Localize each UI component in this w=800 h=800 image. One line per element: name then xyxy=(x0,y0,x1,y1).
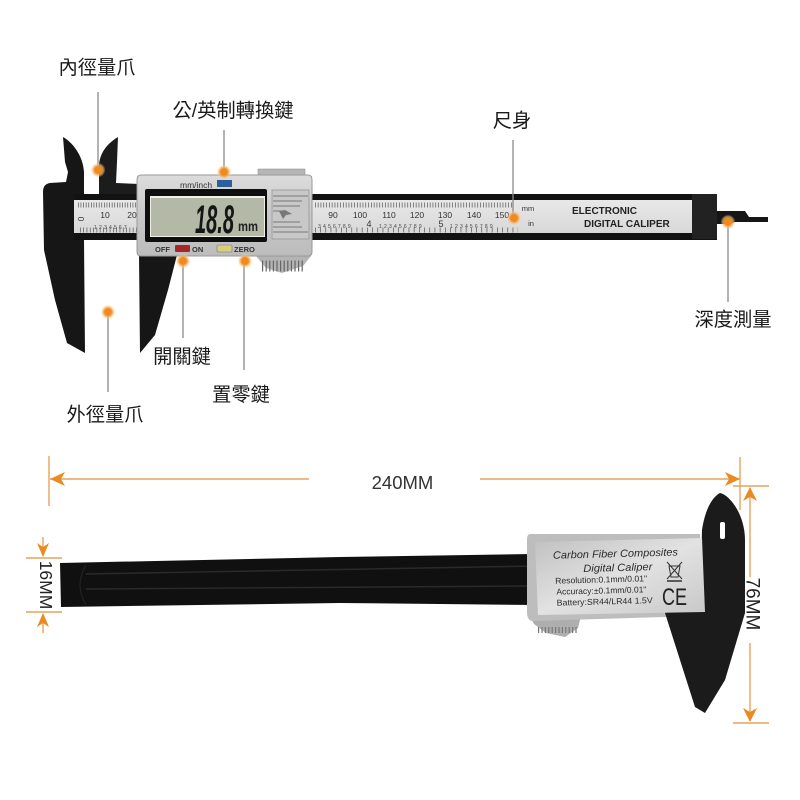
main beam: 110 xyxy=(382,210,396,220)
caliper front view xyxy=(43,137,768,353)
main beam: 90 xyxy=(328,210,338,220)
main beam: 140 xyxy=(467,210,481,220)
plate text: Resolution:0.1mm/0.01" xyxy=(555,573,647,586)
fixed outer and inner jaw xyxy=(43,137,85,353)
dimension: 240mm xyxy=(49,456,740,510)
callout: zero xyxy=(212,254,270,406)
main beam: 20 xyxy=(127,210,137,220)
callout: inner jaw: 內徑量爪 xyxy=(58,57,136,79)
off on button: OFF xyxy=(155,245,170,254)
main beam xyxy=(74,194,717,240)
back jaw xyxy=(665,493,745,713)
dimension: 16mm xyxy=(26,537,62,633)
zero button: ZERO xyxy=(234,245,255,254)
callout: depth xyxy=(694,214,772,331)
callout: zero: 置零鍵 xyxy=(212,384,270,406)
off on button: ON xyxy=(192,245,203,254)
dimension: 240mm: 240MM xyxy=(372,472,433,493)
icon: CE mark: CE xyxy=(662,584,687,611)
lcd reading: 18.8 xyxy=(195,198,234,242)
callout: power xyxy=(153,254,211,368)
callout: unit switch: 公/英制轉換鍵 xyxy=(172,100,294,122)
back thumb wheel xyxy=(528,612,582,637)
main beam: 150 xyxy=(495,210,509,220)
display head: mm xyxy=(238,218,258,234)
lcd bezel xyxy=(145,189,267,242)
main beam: mm xyxy=(522,204,534,213)
main beam: 123456789 xyxy=(450,224,495,230)
bottom thumb wheel xyxy=(256,256,311,273)
plate text: Battery:SR44/LR44 1.5V xyxy=(557,595,653,608)
head behind plate xyxy=(527,534,700,621)
callout: outer jaw: 外徑量爪 xyxy=(66,404,144,426)
main beam: DIGITAL CALIPER xyxy=(584,219,671,230)
thumb panel xyxy=(272,190,309,239)
callout: beam xyxy=(493,110,531,226)
lcd screen xyxy=(150,196,265,237)
sliding outer jaw xyxy=(139,255,177,353)
main beam: 4 xyxy=(366,219,372,229)
icon: recycle bin xyxy=(667,562,682,581)
main beam: 5 xyxy=(438,219,444,229)
callout: power: 開關鍵 xyxy=(153,346,211,368)
plate text: Accuracy:±0.1mm/0.01" xyxy=(556,584,647,597)
callout: depth: 深度測量 xyxy=(694,309,772,331)
jaw slot xyxy=(720,522,725,539)
main beam: 130 xyxy=(438,210,452,220)
main beam: 123456789 xyxy=(379,224,424,230)
spec plate xyxy=(535,538,705,615)
display head xyxy=(137,175,312,256)
mm/inch button xyxy=(180,180,232,190)
plate text: Carbon Fiber Composites xyxy=(553,546,679,562)
main beam: 120 xyxy=(410,210,424,220)
plate text xyxy=(553,546,680,608)
back bar xyxy=(60,554,537,607)
callout: beam: 尺身 xyxy=(493,110,531,132)
callout: outer jaw xyxy=(66,304,144,426)
dimension: 16mm: 16MM xyxy=(36,561,56,609)
callout: inner jaw xyxy=(58,57,136,178)
main beam: in xyxy=(528,219,534,228)
ruler numbers: 0 xyxy=(76,216,86,221)
main beam: 10 xyxy=(100,210,110,220)
top thumb wheel xyxy=(258,169,305,176)
product name: ELECTRONIC xyxy=(572,206,637,217)
ruler ticks xyxy=(78,202,137,208)
dimension: 76mm xyxy=(733,486,769,723)
main beam: 1234567 xyxy=(94,225,129,231)
main beam: 100 xyxy=(353,210,367,220)
dimension: 76mm: 76MM xyxy=(742,578,762,630)
mm/inch button: mm/inch xyxy=(180,180,212,190)
plate text: Digital Caliper xyxy=(583,561,653,575)
callout: unit switch xyxy=(172,100,294,180)
sliding inner jaw xyxy=(99,137,140,196)
main beam: 3456789 xyxy=(318,224,353,230)
zero button xyxy=(217,245,255,254)
caliper back view xyxy=(60,493,745,713)
depth rod xyxy=(717,211,768,224)
off on button xyxy=(155,245,203,254)
